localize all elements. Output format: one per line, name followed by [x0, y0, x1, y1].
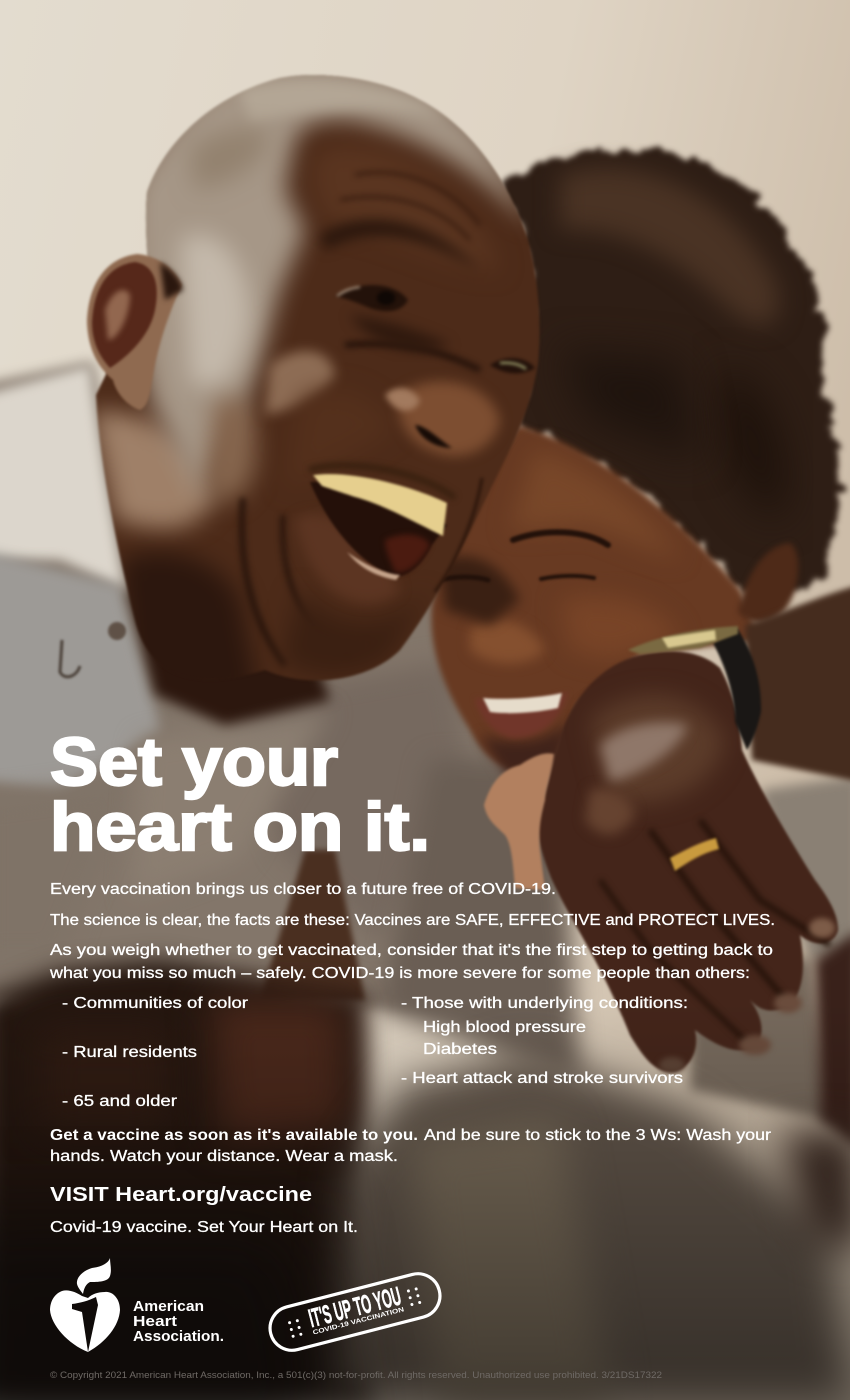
finger grooves [700, 820, 830, 945]
child's ear [738, 543, 798, 623]
chin shadow [480, 720, 570, 775]
call to action text: hands. Watch your distance. Wear a mask. [50, 1148, 398, 1165]
intro text block [49, 881, 775, 982]
risk list: right column: - Those with underlying conditions: [401, 995, 688, 1012]
dark lap region [0, 960, 370, 1400]
risk list: left column: - 65 and older [62, 1093, 178, 1110]
man's hand around child [538, 651, 838, 1073]
man's head [94, 74, 540, 682]
title: heart on it. [50, 789, 430, 865]
cheek highlight [265, 351, 335, 415]
forehead wrinkles [340, 172, 480, 240]
tagline: Covid-19 vaccine. Set Your Heart on It. [50, 1219, 358, 1236]
intro text block: As you weigh whether to get vaccinated, consider that it's the first step to getting back to [50, 942, 773, 959]
intro text block: Every vaccination brings us closer to a future free of COVID-19. [50, 881, 556, 898]
man's neck shadow [128, 590, 330, 725]
badge dots [288, 1287, 422, 1338]
call to action text: And be sure to stick to the 3 Ws: Wash your [424, 1127, 772, 1144]
logo wordmark: American [133, 1299, 204, 1315]
risk list: right column: - Heart attack and stroke survivors [401, 1070, 683, 1087]
copyright line: © Copyright 2021 American Heart Association, Inc., a 501(c)(3) not-for-profit. All rights reserved. Unauthorized use prohibited. 3/21DS17322 [50, 1370, 662, 1381]
title [50, 724, 430, 865]
child's face [431, 425, 798, 775]
lower left dark overlay [0, 1220, 340, 1400]
brown tone in hair [190, 128, 270, 190]
logo wordmark: Association. [133, 1329, 224, 1345]
man's eyes [335, 285, 408, 311]
call to action text [50, 1127, 772, 1165]
logo wordmark: Heart [133, 1314, 177, 1330]
eye socket tones [354, 314, 446, 348]
wrist watch [628, 626, 761, 750]
blurred foreground arm [325, 1050, 850, 1400]
forehead [318, 152, 485, 258]
risk list: right column: Diabetes [423, 1041, 497, 1058]
risk list: right column: High blood pressure [423, 1019, 586, 1036]
nose [399, 381, 500, 456]
grey hair [130, 59, 530, 500]
man's forearm [745, 585, 850, 782]
risk list: left column [62, 995, 249, 1110]
child's hair [500, 148, 838, 590]
call to action text: Get a vaccine as soon as it's available to you. [50, 1127, 418, 1144]
risk list: left column: - Communities of color [62, 995, 249, 1012]
child's right arm, dark brown [815, 930, 850, 1150]
child's nose [470, 620, 545, 664]
intro text block: what you miss so much – safely. COVID-19 is more severe for some people than others: [49, 965, 750, 982]
title: Set your [50, 724, 338, 800]
child's shirt [380, 760, 850, 1120]
man's ear [87, 254, 183, 410]
American Heart Association logo [50, 1258, 224, 1352]
dark overlay gradient [0, 1000, 850, 1400]
lower side highlights [205, 398, 257, 501]
logo wordmark [133, 1299, 224, 1345]
neck tones [90, 410, 215, 529]
intro text block: The science is clear, the facts are these: Vaccines are SAFE, EFFECTIVE and PROTECT LIVES. [50, 912, 775, 929]
child's fingers [484, 753, 554, 890]
child's smile [475, 692, 568, 738]
shadow between faces [440, 556, 520, 625]
child's brows and closed eyes [440, 532, 608, 580]
visit link: VISIT Heart.org/vaccine [50, 1184, 312, 1206]
It's Up To You badge: COVID-19 VACCINATION [312, 1306, 405, 1337]
wedding ring [670, 838, 719, 871]
risk list: left column: - Rural residents [62, 1044, 197, 1061]
It's Up To You badge: IT'S UP TO YOU [305, 1281, 404, 1333]
fingernails [809, 918, 835, 938]
risk list: right column [401, 995, 688, 1087]
jaw [284, 600, 410, 678]
icon: heart and torch [50, 1258, 120, 1352]
man's shirt [0, 362, 500, 1010]
cheek [290, 380, 328, 407]
It's Up To You badge [265, 1269, 445, 1355]
man's open mouth [295, 465, 455, 603]
dark fold lines [242, 498, 285, 665]
